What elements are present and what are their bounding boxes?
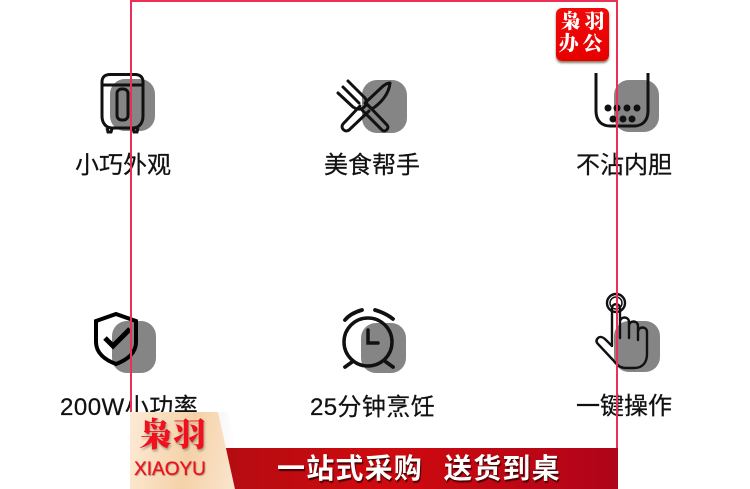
ribbon shadow	[219, 413, 220, 416]
icon: clock backdrop	[361, 323, 406, 373]
label: 美食帮手: 美食帮手	[324, 152, 420, 179]
brand latin name: XIAOYU	[134, 459, 206, 480]
brand name: 枭羽	[139, 418, 207, 454]
label: 一键操作: 一键操作	[576, 393, 672, 420]
slogan text: 一站式采购	[277, 453, 423, 484]
ribbon paper	[130, 412, 236, 489]
badge: brand logo	[556, 8, 609, 61]
slogan text	[277, 453, 561, 484]
label: 200W小功率: 200W小功率	[60, 394, 198, 421]
badge: brand logo: 办公	[558, 33, 606, 55]
panel: small appearance feature	[75, 73, 171, 179]
panel: one-touch operation feature	[576, 292, 672, 420]
slogan text: 送货到桌	[444, 453, 561, 484]
ribbon: XIAOYU brand tag	[130, 412, 235, 489]
panel: food helper feature	[324, 79, 420, 179]
icon: alarm clock	[342, 308, 395, 369]
frame: red outline	[130, 0, 618, 489]
badge: brand logo: 枭羽	[560, 11, 608, 33]
icon: shield backdrop	[112, 321, 156, 373]
panel: low power feature	[60, 312, 198, 421]
panel: non-stick pot feature	[576, 73, 672, 179]
label: 25分钟烹饪: 25分钟烹饪	[310, 394, 435, 421]
icon: pot with grains	[594, 73, 650, 128]
icon: pot backdrop	[614, 80, 659, 132]
icon: shield with check	[94, 312, 138, 366]
icon: cutlery backdrop	[362, 80, 407, 133]
icon: fork and knife	[336, 79, 392, 132]
icon: rice cooker backdrop	[110, 79, 155, 131]
icon: pointing hand	[595, 292, 648, 370]
banner: red slogan bar	[222, 448, 618, 489]
label: 不沾内胆: 不沾内胆	[576, 152, 672, 179]
label: 小巧外观: 小巧外观	[75, 152, 171, 179]
panel: 25 minute cooking feature	[310, 308, 435, 421]
icon: hand backdrop	[614, 321, 660, 372]
icon: rice cooker	[100, 73, 144, 134]
